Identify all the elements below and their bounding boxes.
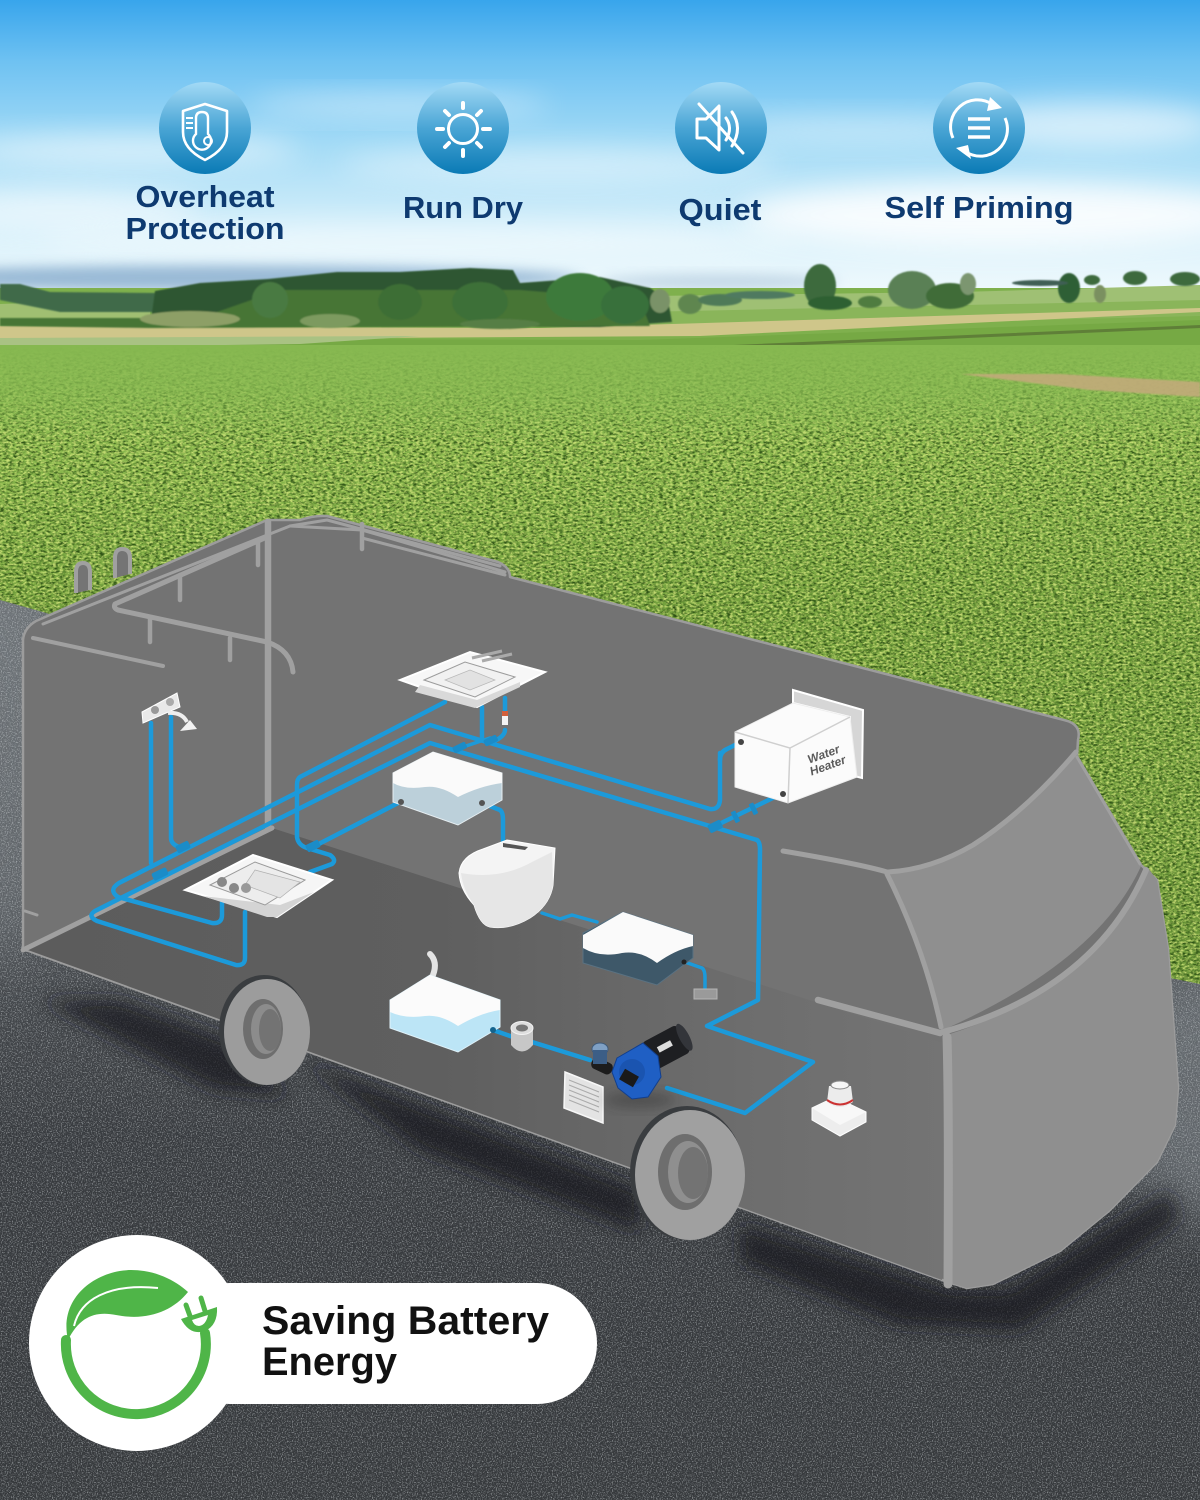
- icon: water pump: [589, 1022, 696, 1108]
- icon: water heater: [735, 690, 863, 803]
- feature: overheat protection: [126, 82, 284, 246]
- feature: self priming: [884, 82, 1074, 225]
- label: overheat protection: Protection: [126, 211, 284, 246]
- icon: inline strainer: [511, 1022, 533, 1052]
- icon: sun: [417, 82, 509, 174]
- icon: battery switch: [812, 1081, 866, 1136]
- label: quiet: Quiet: [678, 192, 762, 227]
- RV body silhouette: [23, 516, 1178, 1288]
- label: water heater: Water: [806, 742, 843, 766]
- treeline silhouette: [0, 264, 1200, 329]
- blue water pipes: [91, 698, 813, 1113]
- RV frame lines: [23, 520, 1146, 1284]
- icon: toilet: [459, 840, 555, 928]
- feature: quiet: [675, 82, 767, 227]
- icon: shield thermometer: [159, 82, 251, 174]
- RV cab front: [887, 752, 1178, 1288]
- label: self priming: Self Priming: [884, 190, 1074, 225]
- icon: lower sink: [185, 855, 332, 917]
- grass field: [0, 345, 1200, 1025]
- icon: grey water tank: [393, 752, 502, 825]
- rear wheel: [219, 975, 310, 1085]
- icon: vent grille: [564, 1072, 603, 1123]
- icon: black water tank: [583, 912, 693, 985]
- icon: muted speaker: [675, 82, 767, 174]
- distant meadow and treeline: [0, 264, 1200, 352]
- icon: shower faucet: [142, 693, 197, 731]
- asphalt road: [0, 560, 1200, 1500]
- sky with clouds: [0, 0, 1200, 310]
- icon: upper sink: [400, 651, 545, 708]
- icon: fresh water tank: [390, 954, 500, 1052]
- label: saving battery energy: Saving Battery: [262, 1299, 550, 1343]
- front wheel: [630, 1106, 745, 1240]
- rear posts: [76, 549, 130, 593]
- icon: priming cycle: [933, 82, 1025, 174]
- pipe fittings: [151, 711, 758, 881]
- label: saving battery energy: Energy: [262, 1340, 398, 1384]
- label: run dry: Run Dry: [403, 190, 524, 225]
- icon: drain fitting: [694, 989, 717, 999]
- badge shape: [29, 1235, 597, 1451]
- RV floor: [25, 828, 950, 1280]
- label: water heater: Heater: [808, 752, 849, 778]
- icon: leaf and plug: [66, 1270, 217, 1414]
- label: overheat protection: Overheat: [136, 179, 274, 214]
- feature: run dry: [403, 82, 524, 225]
- callout: saving battery energy: [29, 1235, 597, 1451]
- RV cutaway: [23, 516, 1178, 1288]
- vehicle shadow: [40, 1000, 1180, 1330]
